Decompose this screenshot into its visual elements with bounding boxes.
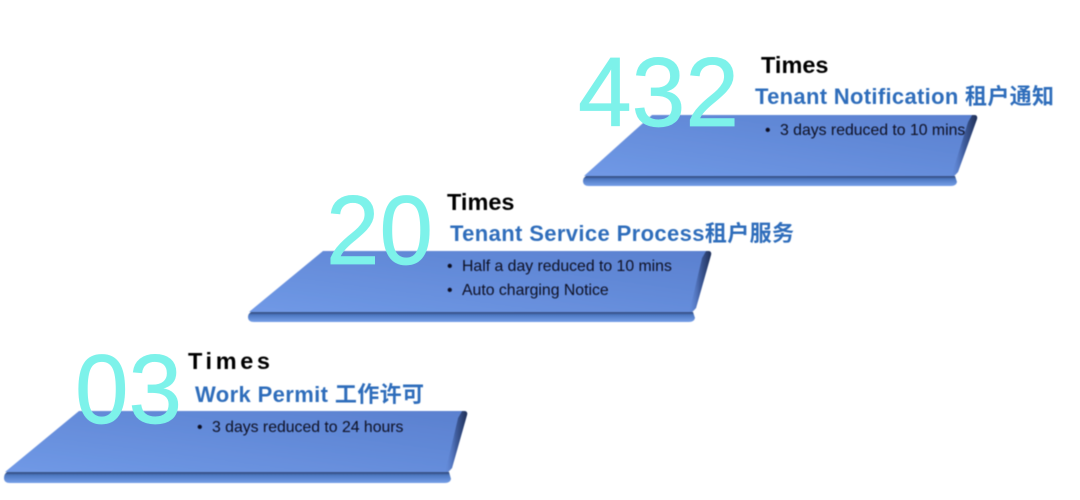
platform: tenant notification (583, 115, 977, 186)
heading: Tenant Service Process: Tenant Service Process租户服务 (450, 221, 794, 246)
bullet text: • (765, 122, 771, 139)
detail: 3 days reduced to 24 hours: 3 days reduced to 24 hours (212, 419, 404, 436)
heading: Tenant Notification: Tenant Notification 租户通知 (755, 84, 1054, 109)
label: Times: Times (761, 52, 828, 78)
platform: work permit (4, 411, 467, 483)
panel: tenant notification (578, 37, 1054, 186)
panel: work permit (4, 334, 467, 483)
bullet list: Auto charging Notice (462, 282, 609, 299)
platform: tenant service process (248, 251, 711, 322)
panel: tenant service process (248, 175, 794, 322)
heading: Work Permit: Work Permit 工作许可 (195, 382, 424, 407)
bullet list (447, 258, 672, 299)
label: Times: Times (188, 348, 270, 374)
detail: 3 days reduced to 10 mins: 3 days reduced to 10 mins (780, 122, 965, 139)
label: Times: Times (447, 189, 514, 215)
bullet list: Half a day reduced to 10 mins (462, 258, 672, 275)
big number 20: 20 (326, 175, 433, 285)
bullet list: • (447, 282, 453, 299)
big number 03: 03 (75, 334, 182, 444)
bullet list: • (447, 258, 453, 275)
big number 432: 432 (578, 37, 739, 147)
bullet text: • (197, 419, 203, 436)
